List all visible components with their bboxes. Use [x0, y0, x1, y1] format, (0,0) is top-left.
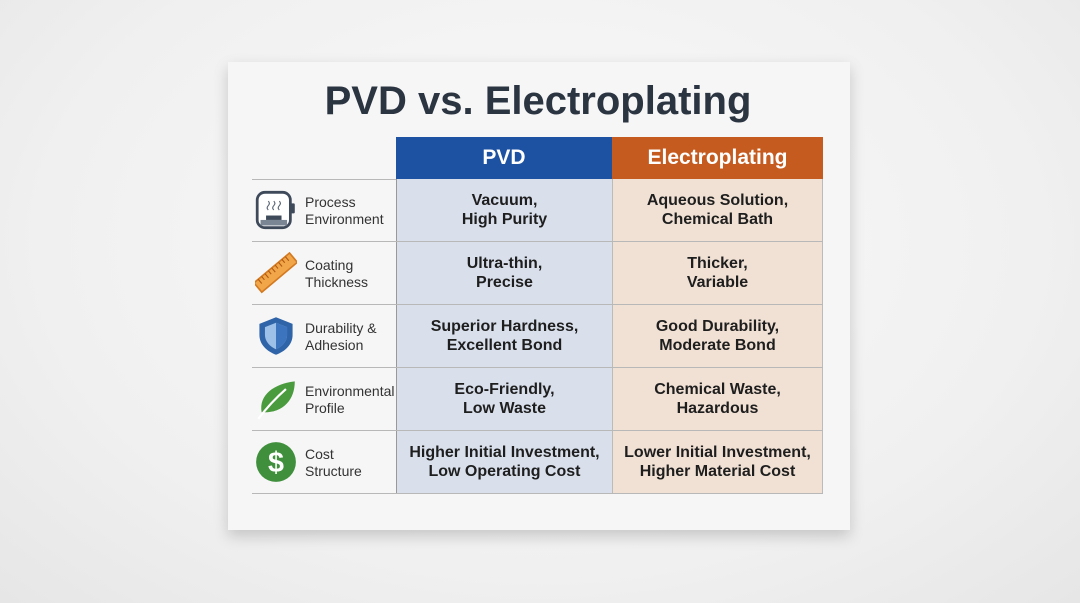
row: process environment: Chemical Bath — [662, 211, 773, 228]
row: cost: Structure — [305, 462, 362, 478]
row: durability: Moderate Bond — [659, 337, 776, 354]
row: cost: Higher Material Cost — [640, 463, 795, 480]
row: environmental: Chemical Waste, — [654, 381, 781, 398]
header: PVD — [396, 137, 612, 179]
row: environmental — [252, 368, 823, 431]
row: durability: Durability & — [305, 320, 377, 336]
row: process environment: Aqueous Solution, — [647, 192, 788, 209]
header: Electroplating — [612, 137, 823, 179]
row: durability — [252, 305, 823, 368]
row: process environment: Environment — [305, 210, 384, 226]
row: environmental: Profile — [305, 400, 345, 416]
row: durability: Adhesion — [305, 336, 363, 352]
row: cost: Higher Initial Investment, — [409, 444, 600, 461]
row: coating thickness: Thickness — [305, 274, 368, 290]
row: environmental: Hazardous — [677, 400, 758, 417]
row: coating thickness: Precise — [476, 274, 533, 291]
row: environmental: Eco-Friendly, — [454, 381, 555, 398]
row: coating thickness: Ultra-thin, — [467, 255, 542, 272]
row: coating thickness: Coating — [305, 257, 353, 273]
row: coating thickness: Thicker, — [687, 255, 748, 272]
row: environmental: Low Waste — [463, 400, 546, 417]
row: cost: Lower Initial Investment, — [624, 444, 811, 461]
card — [228, 62, 850, 530]
header: Electroplating: Electroplating — [647, 146, 788, 169]
title: PVD vs. Electroplating — [325, 79, 751, 123]
row: cost: $ — [268, 447, 284, 479]
row: cost: Low Operating Cost — [428, 463, 580, 480]
row: process environment: Vacuum, — [472, 192, 537, 209]
row: process environment: High Purity — [462, 211, 547, 228]
row: coating thickness: Variable — [687, 274, 748, 291]
row: durability: Superior Hardness, — [431, 318, 578, 335]
row: cost — [252, 431, 823, 494]
row: environmental: Environmental — [305, 383, 394, 399]
row: process environment — [252, 179, 823, 242]
row: cost: Cost — [305, 446, 334, 462]
row: durability: Excellent Bond — [447, 337, 562, 354]
header: PVD: PVD — [482, 146, 526, 169]
row: durability: Good Durability, — [656, 318, 779, 335]
row: process environment: Process — [305, 194, 356, 210]
row top border — [252, 179, 396, 180]
row: coating thickness — [252, 242, 823, 305]
